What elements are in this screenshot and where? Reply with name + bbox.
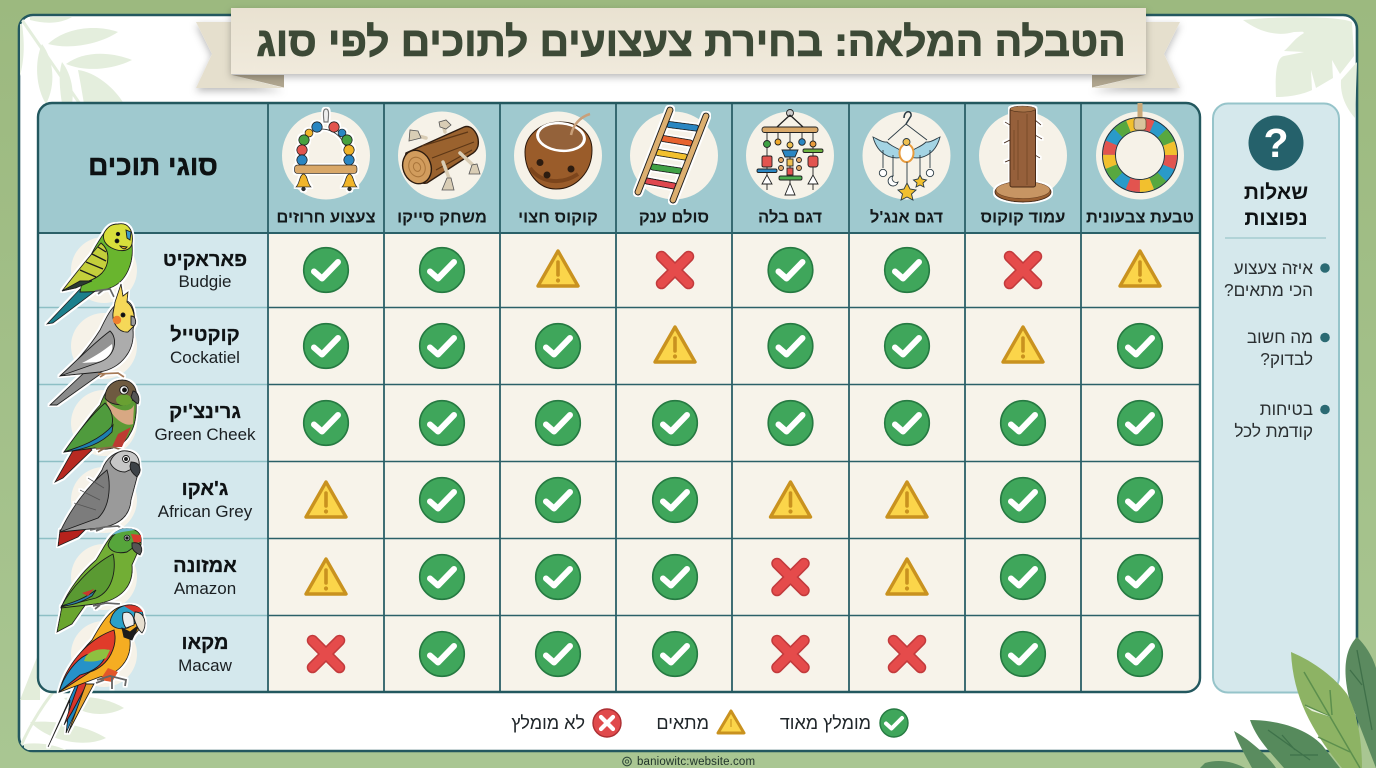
question 2: לבדוק?	[1260, 349, 1313, 369]
row: african grey name	[158, 478, 253, 521]
icon: rope ring	[1109, 103, 1171, 186]
column: angel toy	[862, 112, 950, 226]
icon: coconut	[525, 114, 592, 189]
icon: log	[398, 120, 480, 190]
row: cockatiel name: Cockatiel	[170, 348, 240, 367]
row: amazon name	[173, 555, 237, 598]
row: green cheek name	[154, 401, 256, 444]
decorative leaves: top left	[20, 17, 132, 104]
question 1: הכי מתאים?	[1224, 280, 1313, 300]
row: macaw name	[178, 632, 233, 675]
legend: not recommended	[511, 709, 621, 737]
title banner	[196, 8, 1180, 88]
icon: cockatiel	[50, 284, 136, 405]
column: foraging log	[397, 112, 487, 226]
column: giant ladder	[630, 110, 718, 226]
icon: green cheek conure	[55, 380, 139, 482]
comparison table	[38, 103, 1200, 692]
row: macaw name: מקאו	[181, 632, 229, 654]
rating grid	[304, 248, 1162, 676]
legend: highly recommended: מומלץ מאוד	[780, 713, 871, 733]
question 1	[1224, 258, 1330, 300]
row: macaw name: Macaw	[178, 656, 233, 675]
icon: budgie	[47, 224, 132, 324]
label: דגם בלה	[758, 208, 822, 226]
row: green cheek name: Green Cheek	[154, 425, 256, 444]
legend: not recommended: לא מומלץ	[511, 713, 585, 733]
question 3: בטיחות	[1260, 399, 1313, 419]
panel heading: שאלות	[1244, 181, 1308, 204]
column: bead toy	[276, 109, 376, 226]
column: half coconut	[514, 112, 602, 226]
label: סולם ענק	[639, 208, 709, 226]
green cheek ratings	[304, 401, 1162, 445]
row: cockatiel name	[170, 324, 240, 367]
icon: post	[995, 106, 1051, 202]
label: עמוד קוקוס	[981, 208, 1065, 226]
label: טבעת צבעונית	[1086, 208, 1194, 226]
icon: macaw	[48, 605, 145, 747]
row labels	[154, 249, 256, 675]
row: african grey name: ג'אקו	[182, 478, 229, 500]
label: דגם אנג'ל	[870, 208, 943, 226]
icon: question mark	[1248, 116, 1304, 170]
column: chew mobile	[746, 110, 834, 226]
parrot illustrations	[47, 224, 145, 747]
question 3: קודמת לכל	[1234, 421, 1313, 441]
legend: suitable: מתאים	[656, 713, 709, 733]
question 2: מה חשוב	[1247, 327, 1313, 347]
question 3	[1234, 399, 1330, 441]
row: budgie name: Budgie	[179, 272, 231, 291]
row: amazon name: Amazon	[174, 579, 236, 598]
legend: highly recommended	[780, 709, 908, 737]
legend: suitable	[656, 711, 744, 733]
icon: amazon	[57, 528, 142, 632]
row: amazon name: אמזונה	[173, 555, 237, 577]
decorative leaves: bottom left	[20, 650, 124, 750]
decorative large leaves: bottom right	[1200, 637, 1376, 768]
macaw ratings	[312, 632, 1162, 676]
icon: african grey	[58, 451, 140, 546]
question 2	[1247, 327, 1330, 369]
label: משחק סייקו	[397, 208, 487, 226]
column: coconut post	[979, 106, 1067, 226]
right ribbon	[1092, 22, 1180, 88]
amazon ratings	[306, 555, 1162, 599]
column: colourful ring	[1086, 103, 1194, 226]
legend	[511, 709, 908, 737]
icon: angel wings mobile	[873, 112, 940, 200]
question 1: איזה צעצוע	[1234, 258, 1313, 278]
row: cockatiel name: קוקטייל	[170, 324, 240, 346]
side panel: frequently asked questions	[1213, 104, 1339, 692]
decorative leaves: top right	[1243, 17, 1357, 118]
cockatiel ratings	[304, 324, 1162, 368]
icon: bead swing	[294, 109, 357, 191]
label: צעצוע חרוזים	[276, 208, 376, 226]
title text: הטבלה המלאה: בחירת צעצועים לתוכים לפי סוג	[256, 18, 1126, 64]
row: african grey name: African Grey	[158, 502, 253, 521]
row icons cream circles	[71, 237, 137, 687]
budgie ratings	[304, 248, 1160, 292]
panel heading: נפוצות	[1244, 207, 1308, 230]
panel heading	[1244, 181, 1308, 230]
row: budgie name: פאראקיט	[163, 249, 247, 271]
icon: hanging toy	[757, 110, 823, 195]
footer website credit: baniowitc:website.com	[637, 756, 755, 768]
header: parrot types: סוגי תוכים	[88, 150, 218, 181]
label: קוקוס חצוי	[518, 208, 598, 226]
icon: question mark: ?	[1263, 120, 1289, 166]
african grey ratings	[306, 478, 1162, 522]
row: green cheek name: גרינצ'יק	[169, 401, 241, 423]
row: budgie name	[163, 249, 247, 291]
icon: ladder	[638, 110, 706, 200]
left ribbon	[196, 22, 284, 88]
